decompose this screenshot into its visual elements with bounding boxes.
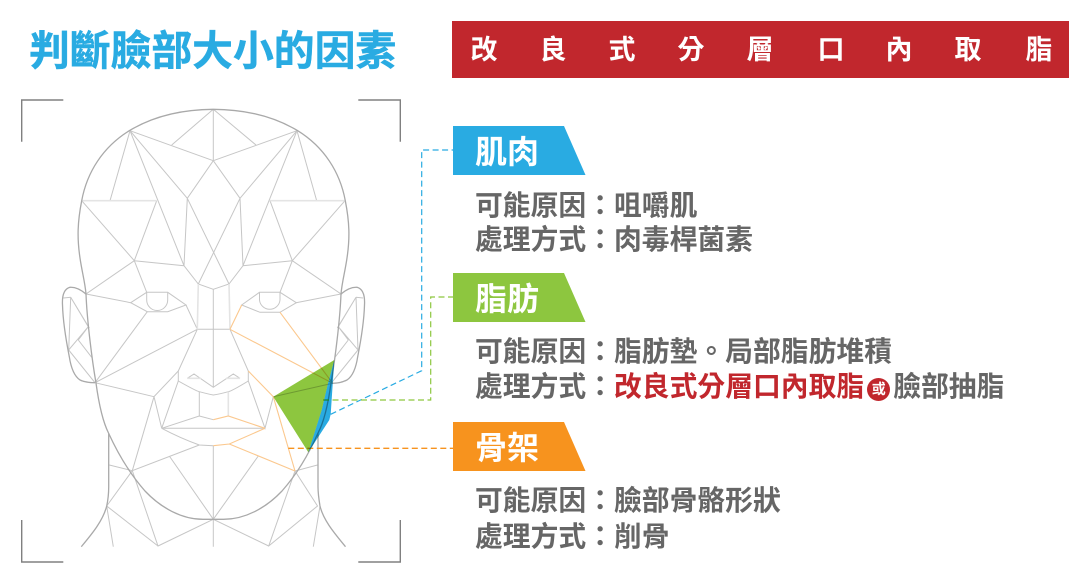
banner: 改良式分層口內取脂: 分 [678,35,704,65]
leader lines [288,150,453,448]
highlighted fat region [273,360,334,452]
banner: 改良式分層口內取脂: 式 [608,35,636,65]
banner: 改良式分層口內取脂: 口 [818,35,844,65]
tag: 脂肪 [453,273,586,322]
light mesh lines [82,201,345,416]
tag: 骨架: 骨架 [475,430,539,466]
text: fat cause: 可能原因：脂肪墊。局部脂肪堆積 [475,336,892,367]
tag: 骨架 [453,422,586,471]
text: bone treatment: 處理方式：削骨 [475,521,670,552]
neck [81,433,109,547]
text: fat treatment: 處理方式：改良式分層口內取脂 臉部抽脂 [475,371,1004,402]
highlighted muscle region [308,360,334,452]
text: muscle treatment: 處理方式：肉毒桿菌素 [475,224,753,255]
tag: 肌肉: 肌肉 [475,134,539,170]
banner: 改良式分層口內取脂: 脂 [1026,35,1052,65]
face mesh lines [64,109,363,547]
tag: 脂肪: 脂肪 [475,281,539,317]
banner: 改良式分層口內取脂: 內 [886,35,912,65]
tag: 肌肉 [453,126,586,175]
text: bone cause: 可能原因：臉部骨骼形狀 [475,485,781,516]
left ear mesh [64,297,95,383]
text: muscle cause: 可能原因：咀嚼肌 [475,190,697,221]
orange cheek lines [213,305,333,471]
title: 判斷臉部大小的因素 [29,28,396,74]
banner: 改良式分層口內取脂 [452,21,1069,78]
banner: 改良式分層口內取脂: 改 [470,35,498,65]
banner: 改良式分層口內取脂: 良 [540,35,566,65]
banner: 改良式分層口內取脂: 層 [746,35,774,65]
head outline [62,109,365,547]
right ear mesh [332,297,363,383]
text: fat treatment: 或 [872,381,886,397]
right ear outline [332,287,365,383]
corner brackets [22,100,400,562]
banner: 改良式分層口內取脂: 取 [954,35,982,65]
left ear outline [62,287,95,383]
